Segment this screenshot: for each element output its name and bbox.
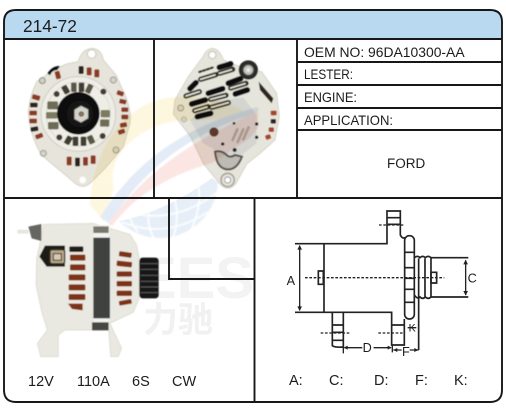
stator: [93, 225, 109, 330]
icon: side view alternator: [17, 223, 159, 357]
stator windows: [29, 66, 128, 166]
watermark: swoosh arcs: [90, 97, 258, 226]
rectifier slots: [186, 64, 247, 117]
spec: lester: LESTER:: [304, 66, 353, 82]
terminal post: [239, 60, 258, 80]
title: 214-72: [23, 16, 77, 36]
dimension arrows: [300, 246, 466, 353]
dimension legend: A:: [289, 373, 303, 389]
pink arc: [108, 111, 258, 226]
icon: rear view alternator: [173, 48, 279, 188]
dimension letters: A: [287, 274, 296, 288]
fan vents: [46, 83, 110, 146]
blue arc: [100, 107, 258, 224]
dimension legend: F:: [415, 373, 428, 389]
dashed centre lines: [305, 225, 444, 333]
spec: OEM number: OEM NO: 96DA10300-AA: [304, 44, 465, 60]
dimension diagram: [287, 211, 477, 359]
dimension letters: D: [363, 341, 372, 355]
electrical ratings: 12V: [28, 374, 54, 390]
winding slots right: [116, 251, 132, 306]
pulley: [139, 258, 159, 298]
electrical ratings: 6S: [132, 374, 150, 390]
electrical ratings: 110A: [77, 374, 110, 390]
dimension letters: [287, 272, 477, 359]
stator windows: [259, 82, 277, 140]
yellow arc: [90, 97, 252, 222]
header band: [4, 10, 502, 39]
output terminal: [28, 224, 41, 241]
regulator details: [209, 127, 219, 137]
dimension legend: D:: [374, 373, 388, 389]
spec: engine: ENGINE:: [304, 89, 357, 105]
dimension letters: C: [468, 272, 477, 286]
dimension legend: C:: [329, 373, 344, 389]
body outline: [295, 211, 405, 345]
watermark: brand letters: EES: [138, 246, 254, 311]
electrical ratings: [28, 374, 196, 390]
pulley and nut: [57, 92, 100, 135]
application value: FORD: [387, 156, 425, 171]
electrical ratings: CW: [172, 374, 196, 390]
dimension letters: K: [409, 323, 416, 335]
watermark: brand name in Chinese: 力驰: [143, 301, 213, 340]
dimension legend: [289, 373, 468, 389]
icon: front view alternator: [28, 48, 130, 186]
winding slots left: [68, 246, 85, 310]
dimension letters: F: [402, 345, 410, 359]
connector: [39, 246, 65, 267]
watermark: globe: [120, 178, 218, 238]
spec: application: APPLICATION:: [304, 112, 393, 128]
dimension legend: K:: [454, 373, 468, 389]
